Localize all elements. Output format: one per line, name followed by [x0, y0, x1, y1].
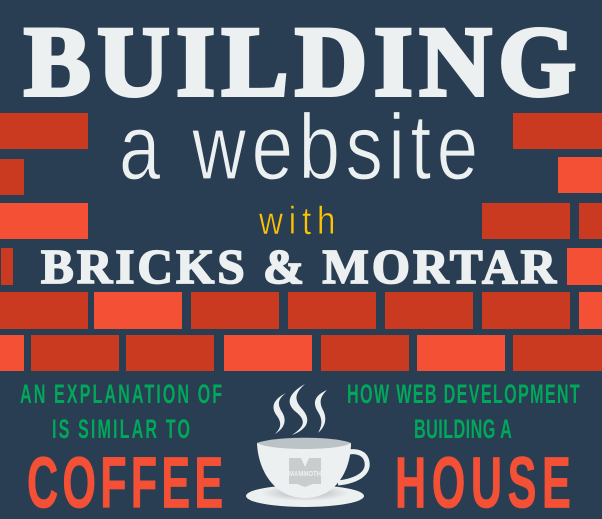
cup rim [257, 438, 351, 449]
title: BUILDING: BUILDING [24, 6, 576, 117]
saucer [246, 485, 364, 507]
left text: is similar to: IS SIMILAR TO [52, 414, 190, 444]
word: with: with [258, 198, 336, 243]
steam [274, 384, 327, 435]
cup body [257, 443, 351, 498]
brick wall [0, 113, 602, 371]
logo: mammoth: MAMMOTH [289, 471, 321, 478]
right text: how web development: HOW WEB DEVELOPMENT [347, 379, 580, 409]
left text: an explanation of: AN EXPLANATION OF [20, 379, 222, 409]
heading: BRICKS & MORTAR: BRICKS & MORTAR [41, 239, 557, 294]
subtitle: a website: a website [119, 95, 478, 199]
icon: coffee cup [246, 384, 367, 507]
handle [338, 452, 367, 483]
right text: building a: BUILDING A [414, 414, 512, 444]
